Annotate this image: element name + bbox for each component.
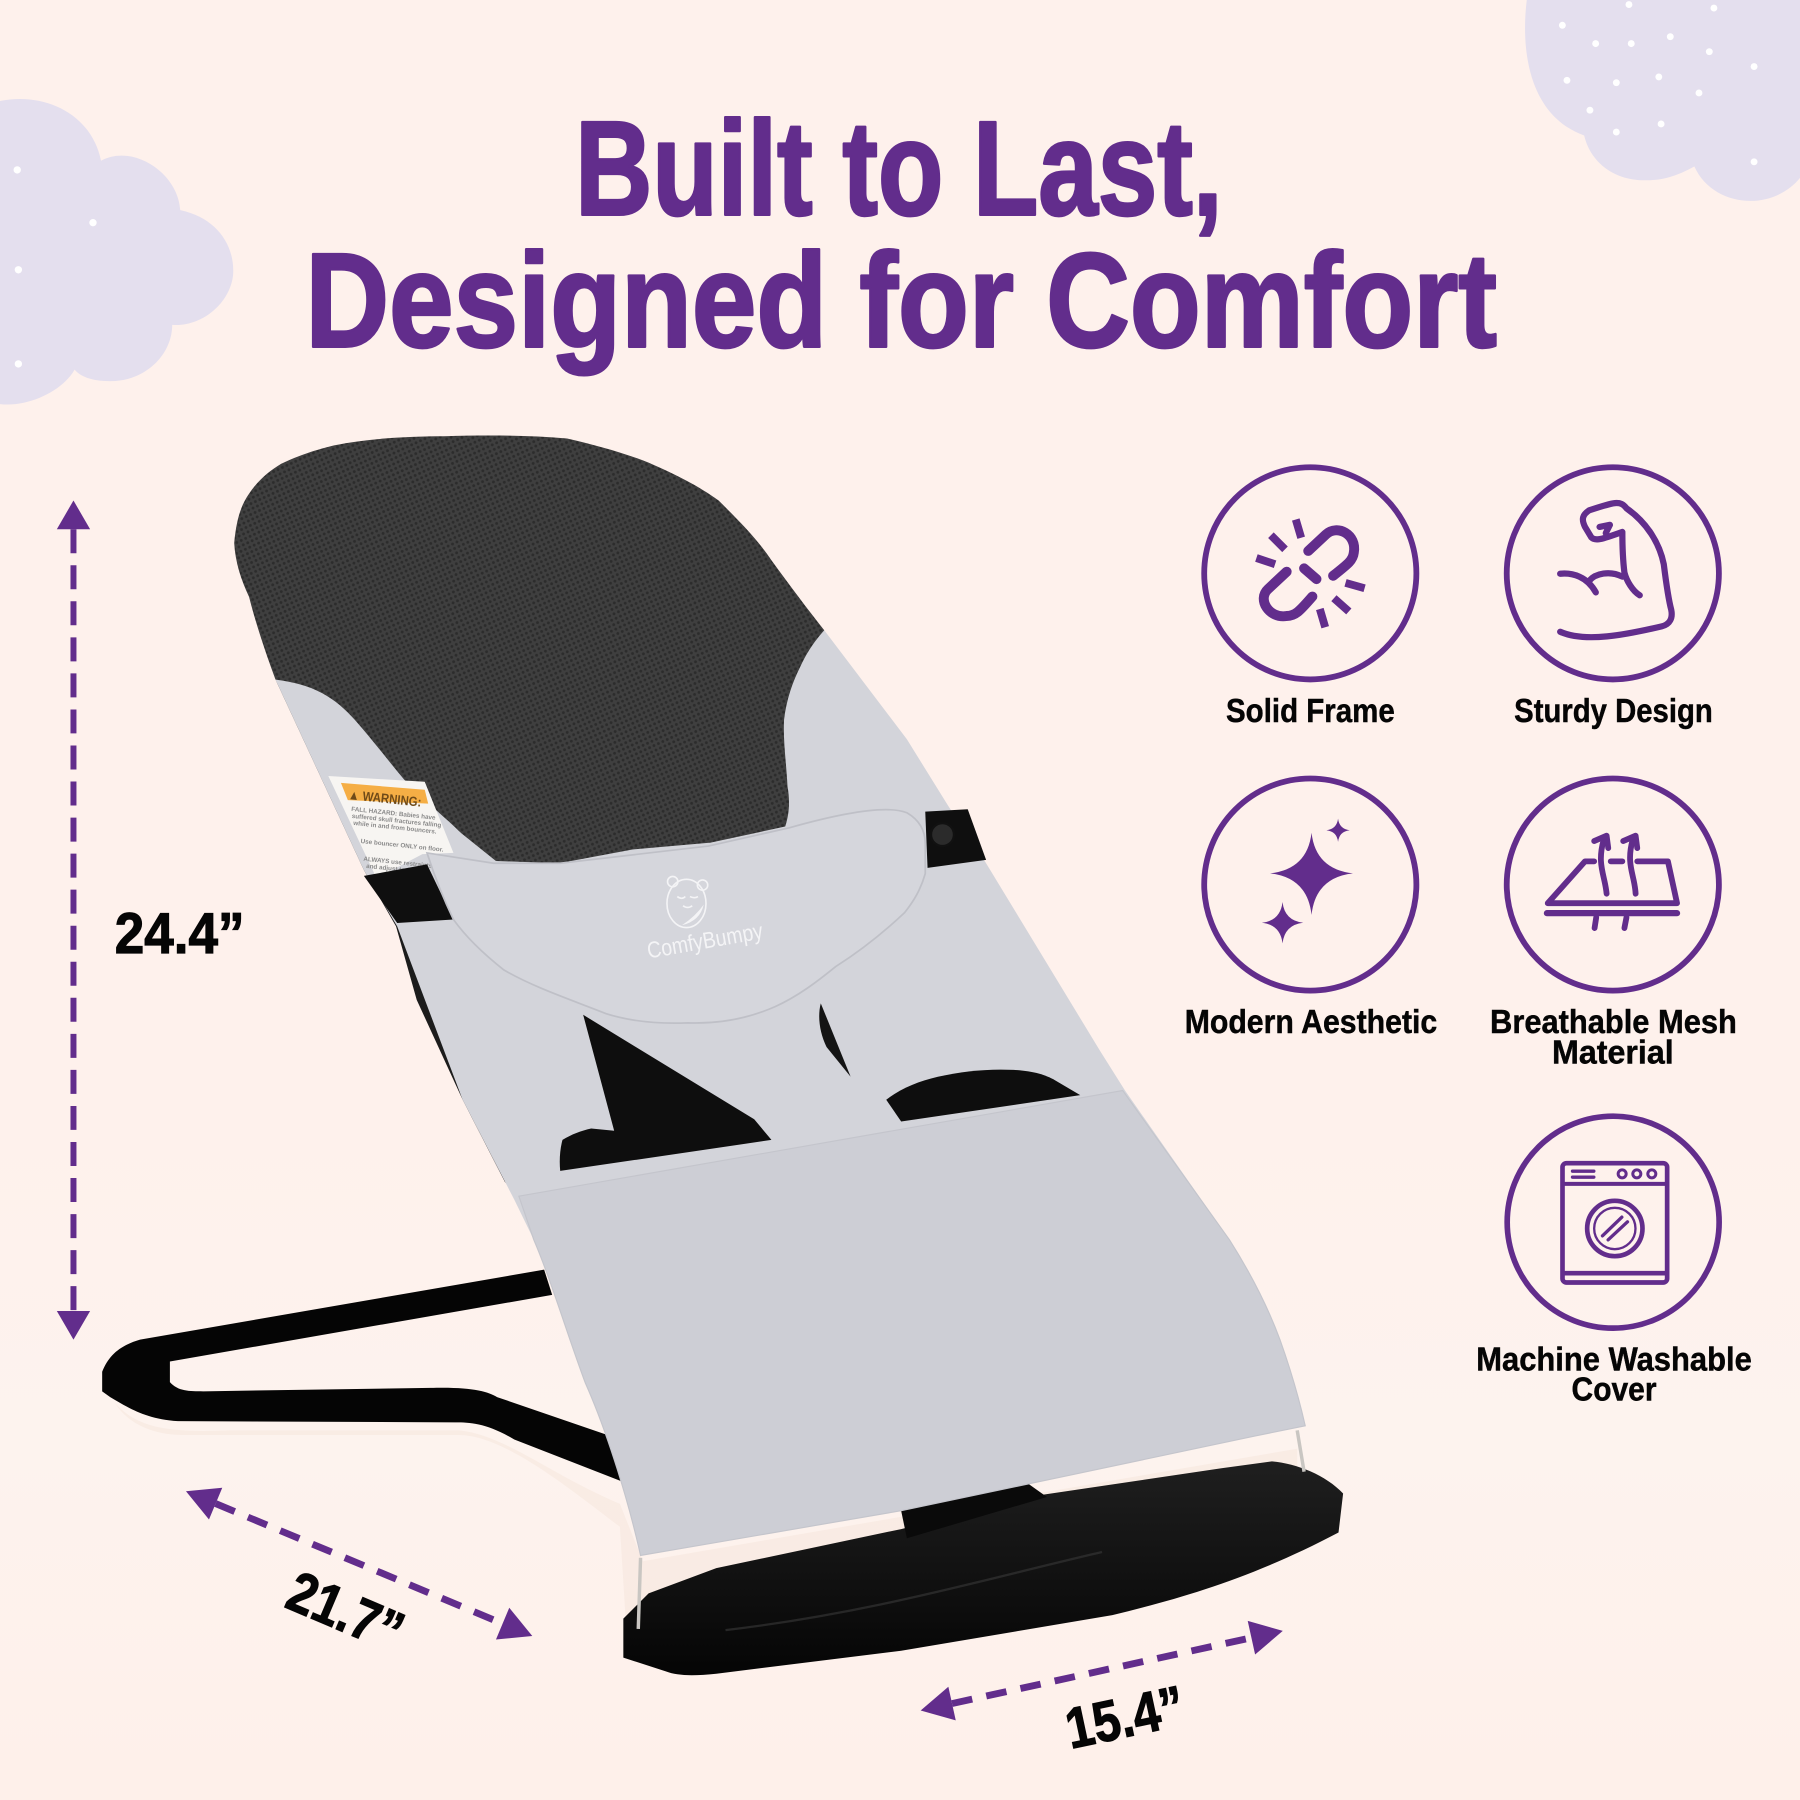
arrow: width dimension [917, 1614, 1287, 1727]
floor base [623, 1461, 1343, 1675]
label: Material [1552, 1035, 1674, 1072]
warning label: suffered skull fractures falling [351, 813, 442, 829]
icon: sparkles [1204, 778, 1416, 991]
strap: right buckle [925, 809, 986, 868]
rear mesh edge [276, 680, 519, 1182]
grey fabric seat [276, 630, 1305, 1555]
warning label [328, 776, 453, 878]
metal wires [638, 1430, 1304, 1629]
label [1490, 1004, 1737, 1072]
warning label: ALWAYS use restraints [363, 856, 433, 870]
warning label: ▲ WARNING: [348, 787, 422, 810]
icon: washing machine [1507, 1116, 1719, 1328]
leg opening: left [560, 1015, 771, 1171]
title: Built to Last, [575, 94, 1223, 244]
floor shadow [115, 1403, 1297, 1619]
feature: modern aesthetic [1185, 778, 1437, 1041]
title: Designed for Comfort [305, 226, 1497, 376]
wire stand frame [102, 1270, 643, 1504]
depth value: 21.7” [278, 1559, 413, 1665]
warning label: while in and from bouncers. [352, 820, 437, 836]
icon: airflow through mesh [1507, 778, 1719, 991]
cloud: top right [1525, 0, 1800, 201]
strap: left buckle [364, 864, 453, 923]
warning label: and adjust to fit [366, 863, 414, 875]
brand logo [645, 876, 765, 963]
padded head support [427, 810, 925, 1023]
label: Sturdy Design [1514, 693, 1713, 730]
label: Machine Washable [1476, 1342, 1752, 1379]
warning label: FALL HAZARD: Babies have [351, 806, 436, 822]
icon: flexed arm [1507, 467, 1719, 679]
feature: sturdy design [1507, 467, 1719, 730]
label: Solid Frame [1226, 693, 1395, 730]
title [305, 94, 1497, 376]
label: Cover [1572, 1372, 1657, 1409]
leg opening: right [886, 1070, 1080, 1122]
label [1476, 1342, 1752, 1409]
icon: broken link [1204, 467, 1416, 679]
base highlight [726, 1552, 1102, 1630]
label: Breathable Mesh [1490, 1004, 1737, 1041]
mesh head section [234, 436, 824, 872]
width value: 15.4” [1060, 1674, 1190, 1762]
arrow: height dimension [57, 501, 90, 1340]
cloud: left [0, 99, 233, 405]
feature: solid frame [1204, 467, 1416, 730]
height value: 24.4” [115, 902, 245, 966]
product: baby bouncer [102, 436, 1343, 1675]
brand logo: ComfyBumpy [645, 917, 765, 963]
leg opening: narrow slit [819, 1003, 851, 1077]
feature: breathable mesh material [1490, 778, 1737, 1072]
feature: machine washable cover [1476, 1116, 1752, 1409]
lower fabric panel [519, 1091, 1305, 1555]
label: Modern Aesthetic [1185, 1004, 1437, 1041]
warning label: Use bouncer ONLY on floor. [360, 838, 444, 854]
arrow: depth dimension [179, 1475, 539, 1652]
base centre connector [901, 1483, 1047, 1538]
